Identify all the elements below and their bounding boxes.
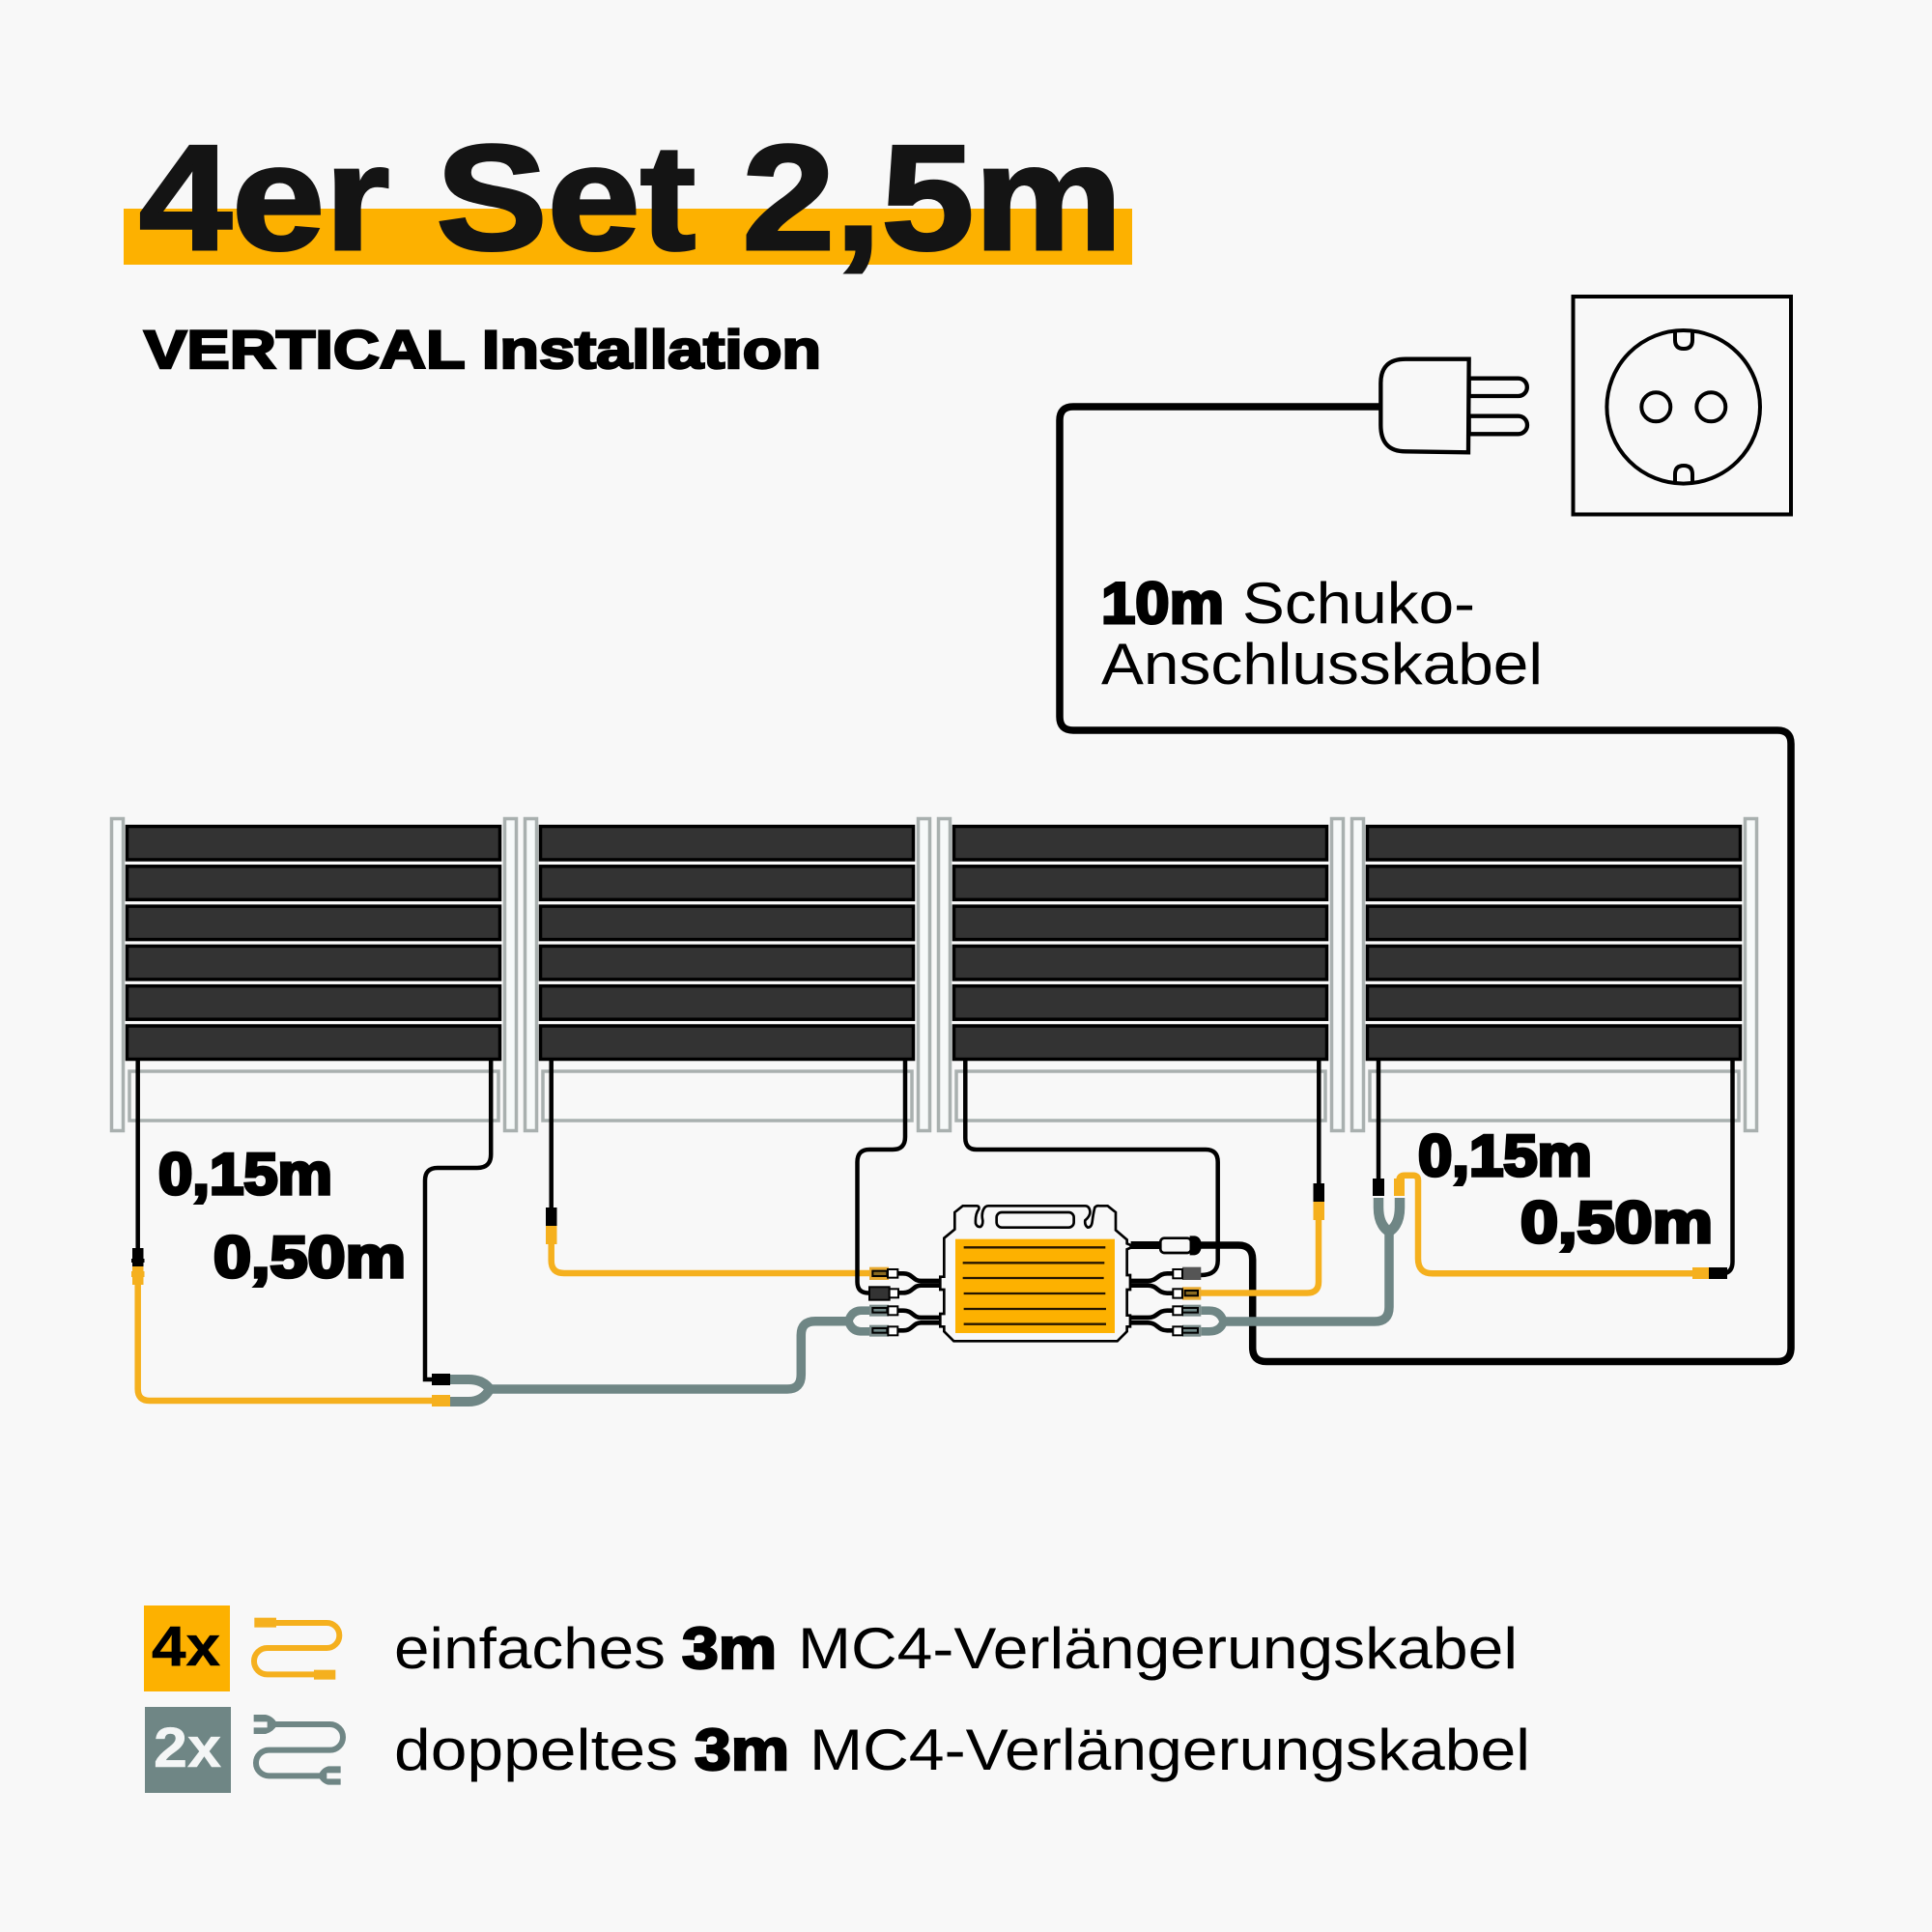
- quantity badge 2x: [145, 1707, 231, 1793]
- title highlight bar: [124, 209, 1132, 265]
- wall socket: [1573, 297, 1791, 514]
- panel 4 wiring: [1373, 1061, 1733, 1279]
- label: 0,15m left: 0,15m: [158, 1142, 332, 1207]
- inverter body: [940, 1206, 1131, 1341]
- quantity badge 4x: [144, 1605, 230, 1691]
- inverter handle: [997, 1212, 1074, 1228]
- quantity badge 4x: 4x: [152, 1615, 220, 1678]
- inverter face lines: [963, 1247, 1106, 1324]
- panel 2 wiring: [546, 1061, 905, 1293]
- double MC4 extension cable, right: [1219, 1198, 1400, 1321]
- inverter connectors: [869, 1267, 1201, 1337]
- title: [124, 114, 1132, 281]
- solar panel 3: [939, 819, 1343, 1130]
- label: 0,50m right: 0,50m: [1520, 1190, 1713, 1255]
- schuko plug: [1380, 359, 1527, 452]
- legend text double: doppeltes: [394, 1718, 678, 1782]
- subtitle: VERTICAL Installation: [144, 319, 821, 380]
- legend text single: MC4-Verlängerungskabel: [798, 1616, 1518, 1681]
- panel 1 wiring: [131, 1061, 491, 1406]
- cable label: 10m Schuko-Anschlusskabel: [1101, 571, 1543, 696]
- AC connection cable: [1060, 407, 1791, 1362]
- icon: double cable: [254, 1715, 343, 1785]
- legend text single: 3m: [682, 1616, 777, 1681]
- legend row: double cable: [145, 1707, 1530, 1793]
- label: 0,50m left: 0,50m: [213, 1225, 406, 1290]
- panel 3 wiring: [965, 1061, 1324, 1293]
- inverter leads: [897, 1273, 1173, 1330]
- solar panel 4: [1352, 819, 1756, 1130]
- inverter orange face: [955, 1239, 1115, 1333]
- cable label: 10m Schuko-Anschlusskabel: 10m: [1101, 571, 1224, 636]
- legend text single: [394, 1616, 1518, 1681]
- cable label: 10m Schuko-Anschlusskabel: Schuko-: [1242, 571, 1475, 636]
- right loop of grey cable: [1201, 1311, 1224, 1331]
- solar panel 1: [112, 819, 516, 1130]
- cable label: 10m Schuko-Anschlusskabel: Anschlusskabel: [1101, 632, 1543, 696]
- solar panel 2: [526, 819, 929, 1130]
- left loop of grey cable: [848, 1311, 869, 1331]
- label: 0,15m right: 0,15m: [1418, 1123, 1592, 1188]
- legend text double: 3m: [695, 1718, 789, 1782]
- legend text single: einfaches: [394, 1616, 666, 1681]
- AC output connector: [1131, 1236, 1202, 1255]
- legend text double: [394, 1718, 1530, 1782]
- title text: 4er Set 2,5m: [139, 114, 1122, 281]
- legend text double: MC4-Verlängerungskabel: [810, 1718, 1530, 1782]
- inverter: [848, 1206, 1224, 1341]
- legend row: single cable: [144, 1605, 1518, 1691]
- icon: single cable: [254, 1618, 339, 1680]
- double MC4 extension cable, left: [450, 1321, 850, 1402]
- quantity badge 2x: 2x: [154, 1717, 221, 1779]
